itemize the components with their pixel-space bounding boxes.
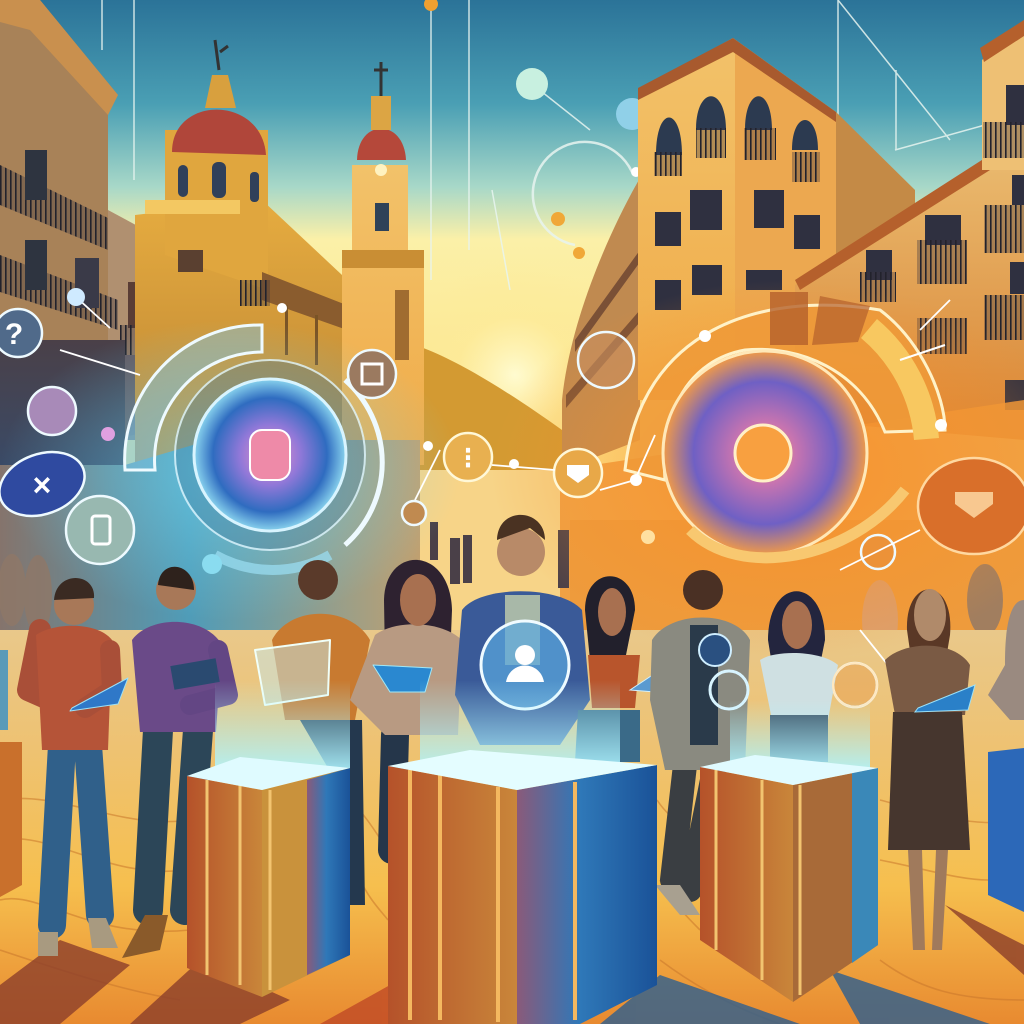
person 3 (255, 560, 370, 905)
person 2 (122, 567, 228, 958)
network nodes (67, 288, 947, 574)
person 4 (350, 560, 462, 850)
person 10 edge (0, 600, 1024, 730)
sky background (0, 0, 1024, 520)
sky network lines (102, 0, 985, 290)
person 6 (575, 576, 675, 762)
blue hologram dial (125, 325, 382, 570)
left blue glow field (0, 320, 460, 620)
box 3 center (388, 750, 657, 1024)
street and crowd backdrop (0, 400, 1024, 660)
sun glow (400, 260, 630, 490)
ground wood-grain lines (0, 798, 1024, 1024)
bubble icon glyphs (5, 318, 993, 544)
bubble icon glyphs: × (33, 467, 51, 503)
ground shadows (0, 905, 1024, 1024)
right orange glow field (490, 280, 1024, 660)
sky dots (424, 0, 648, 259)
distant hill (415, 345, 562, 500)
right tall building (562, 38, 915, 470)
person 5 center (455, 515, 590, 745)
network links (60, 297, 950, 680)
ground plaza (0, 630, 1024, 1024)
church with domes (135, 40, 424, 470)
box 4 (700, 755, 878, 1002)
floating icon bubbles (0, 309, 1024, 707)
person 9 (885, 589, 975, 950)
person 8 (760, 591, 877, 762)
bubble icon glyphs: ? (5, 318, 23, 351)
person 1 (28, 578, 128, 956)
person 7 (650, 570, 750, 915)
right side building (795, 20, 1024, 440)
box left edge (0, 742, 22, 897)
left building (0, 0, 210, 470)
orange hologram dial (625, 292, 945, 558)
box right edge (988, 748, 1024, 912)
box 2 (187, 757, 350, 997)
holographic beams (215, 680, 870, 770)
bubble icon glyphs: ⁝ (463, 442, 473, 475)
